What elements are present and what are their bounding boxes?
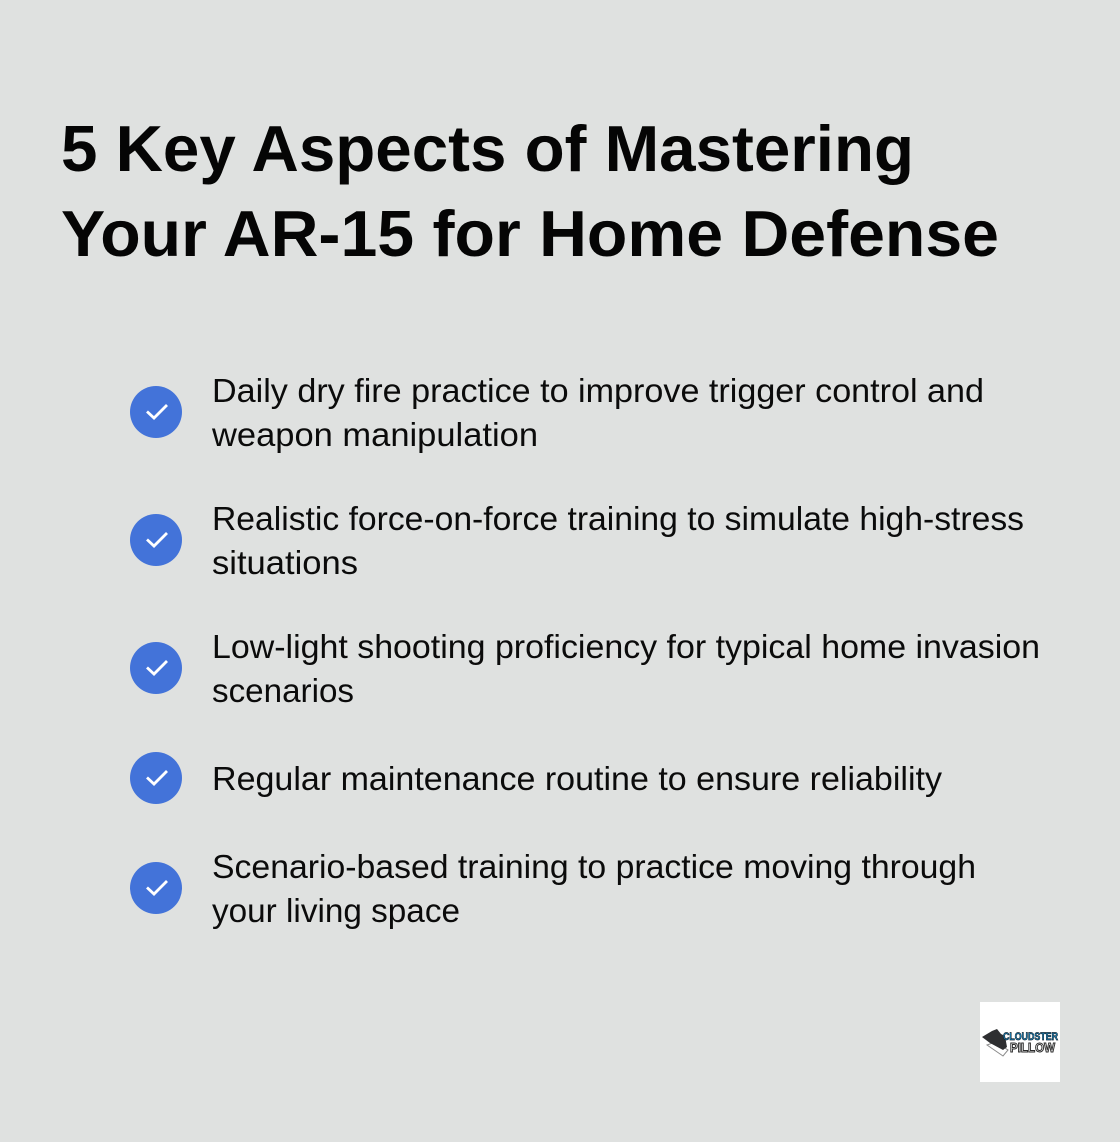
icon: check badge 5: [130, 862, 182, 914]
text: dry fire practice: Daily dry fire practice to improve trigger control and: [212, 372, 984, 409]
icon: check badge 2: [130, 514, 182, 566]
text: low-light shooting: scenarios: [212, 672, 354, 709]
list item 2: force-on-force training: [130, 500, 1024, 581]
icon: check badge 1: [130, 386, 182, 438]
logo wordmark: [1003, 1031, 1058, 1055]
list item 3: low-light shooting: [130, 628, 1040, 709]
text: scenario-based training: [212, 848, 976, 929]
text: low-light shooting: [212, 628, 1040, 709]
logo: Cloudster Pillow: [980, 1002, 1060, 1082]
text: scenario-based training: your living space: [212, 892, 460, 929]
list item 4: maintenance routine: [130, 752, 943, 804]
icon: check badge 4: [130, 752, 182, 804]
text: low-light shooting: Low-light shooting proficiency for typical home invasion: [212, 628, 1040, 665]
list item 1: dry fire practice: [130, 372, 984, 453]
text: force-on-force training: [212, 500, 1024, 581]
text: scenario-based training: Scenario-based training to practice moving through: [212, 848, 976, 885]
logo wordmark: CLOUDSTER: [1003, 1031, 1058, 1043]
icon: pillow: [982, 1029, 1008, 1056]
title: [61, 112, 999, 270]
text: dry fire practice: [211, 372, 984, 453]
logo wordmark: PILLOW: [1010, 1040, 1056, 1055]
text: force-on-force training: situations: [212, 544, 358, 581]
text: dry fire practice: weapon manipulation: [211, 416, 538, 453]
text: maintenance routine: Regular maintenance routine to ensure reliability: [212, 760, 943, 797]
title: 5 Key Aspects of Mastering: [61, 112, 914, 185]
text: force-on-force training: Realistic force-on-force training to simulate high-stress: [212, 500, 1024, 537]
icon: check badge 3: [130, 642, 182, 694]
title: Your AR-15 for Home Defense: [61, 197, 999, 270]
list item 5: scenario-based training: [130, 848, 976, 929]
